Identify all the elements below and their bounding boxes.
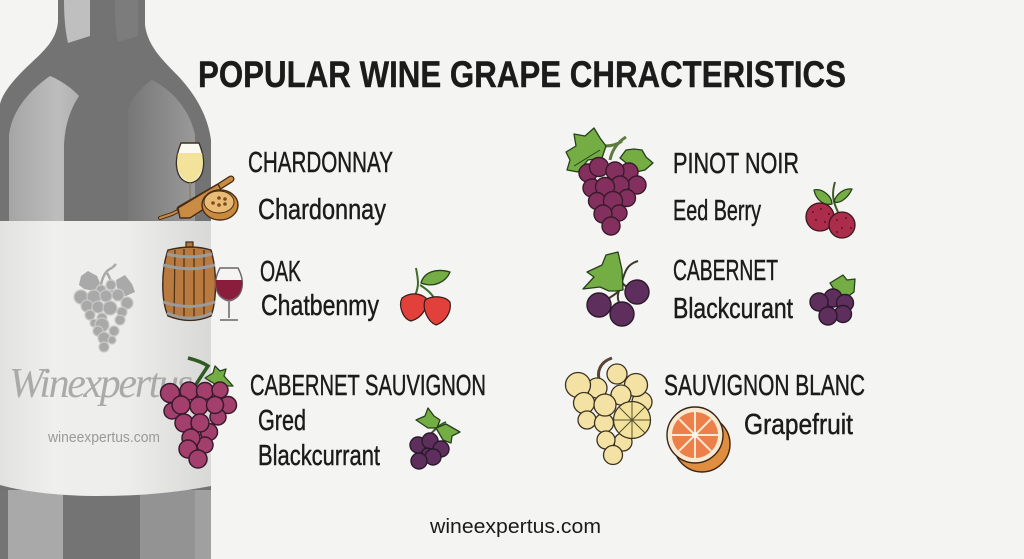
icon: small blackcurrant cluster <box>810 275 855 325</box>
icon: pinot noir grape bunch <box>566 128 653 235</box>
text: Chardonnay heading: CHARDONNAY <box>248 147 393 179</box>
label grape logo <box>74 264 135 352</box>
icon: oak barrel <box>163 242 216 320</box>
icon: blackcurrants with leaf <box>583 252 649 326</box>
icon: small dark grapes <box>410 408 460 469</box>
icon: red berries <box>401 268 450 325</box>
text: Blackcurrant: Blackcurrant <box>258 440 380 472</box>
text: Sauvignon Blanc heading: SAUVIGNON BLANC <box>664 370 865 402</box>
icon: white wine glass <box>176 143 204 214</box>
text: Chardonnay note: Chardonnay <box>258 194 386 226</box>
text: Cabernet Sauvignon heading: CABERNET SAUVIGNON <box>250 370 486 402</box>
bottle label <box>0 221 211 496</box>
text: Grapefruit: Grapefruit <box>744 409 853 441</box>
text: Gred: Gred <box>258 405 306 437</box>
footer url: wineexpertus.com <box>429 516 601 538</box>
title: POPULAR WINE GRAPE CHRACTERISTICS <box>198 54 846 95</box>
icon: raspberries <box>806 182 855 238</box>
label url: wineexpertus.com <box>47 430 160 446</box>
icon: white grape bunch with lemon slice <box>566 358 652 464</box>
icon: large red grape bunch <box>160 358 236 468</box>
text: Blackcurant: Blackcurant <box>673 293 793 325</box>
text: Eed Berry: Eed Berry <box>673 195 761 227</box>
label script wordmark: Winexpertus <box>9 361 193 407</box>
text: Oak heading: OAK <box>260 256 301 288</box>
icon: red wine glass <box>216 268 242 320</box>
icon: grapefruit slice <box>667 407 730 472</box>
text: Cabernet heading: CABERNET <box>673 255 778 287</box>
text: Pinot Noir heading: PINOT NOIR <box>673 148 799 180</box>
wine bottle <box>0 0 211 559</box>
text: Oak note: Chatbenmy <box>261 290 379 322</box>
icon: rolling pin and bread <box>160 179 238 220</box>
